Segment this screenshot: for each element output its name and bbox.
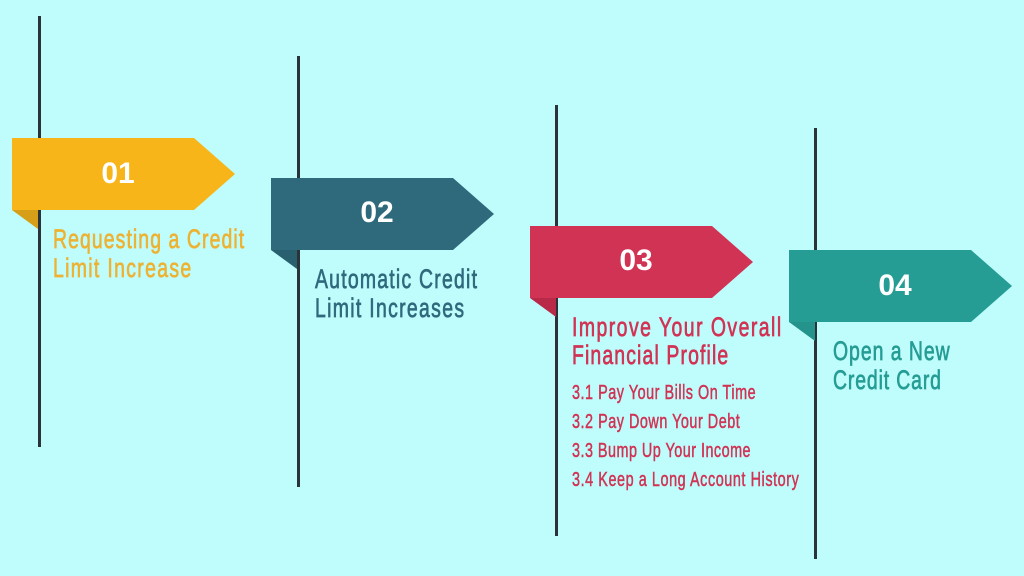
step 2 heading: Limit Increases	[315, 293, 464, 323]
step 3 ribbon fold	[530, 298, 556, 317]
step 3 sub-list	[572, 381, 799, 491]
step 1 pole	[38, 16, 41, 447]
step 2 heading: Automatic Credit	[315, 264, 477, 294]
step 4 number: 04	[878, 269, 912, 302]
step 1 arrow banner	[12, 138, 235, 210]
step 4 heading: Open a New	[833, 336, 950, 366]
step 3 sub-list: 3.2 Pay Down Your Debt	[572, 410, 740, 433]
step 3 number: 03	[619, 244, 653, 277]
step 3 heading: Improve Your Overall	[572, 312, 781, 342]
step 3 arrow banner	[530, 226, 753, 298]
step 1 heading: Limit Increase	[53, 253, 191, 283]
step 3 sub-list: 3.3 Bump Up Your Income	[572, 439, 751, 462]
step 3 heading	[572, 312, 781, 370]
step 3 sub-list: 3.4 Keep a Long Account History	[572, 468, 799, 491]
step 1 heading: Requesting a Credit	[53, 224, 245, 254]
step 1 ribbon fold	[12, 210, 38, 229]
step 4 heading: Credit Card	[833, 365, 941, 395]
step 3 heading: Financial Profile	[572, 340, 728, 370]
step 4 arrow banner	[789, 250, 1012, 322]
step 3 sub-list: 3.1 Pay Your Bills On Time	[572, 381, 756, 404]
step 2	[271, 56, 494, 487]
step 2 number: 02	[360, 196, 394, 229]
step 4	[789, 128, 1012, 559]
step 3 pole	[555, 105, 558, 536]
step 2 arrow banner	[271, 178, 494, 250]
step 1 number: 01	[101, 157, 135, 190]
step 1 heading	[53, 224, 245, 283]
step 2 ribbon fold	[271, 250, 297, 269]
step 4 ribbon fold	[789, 322, 815, 341]
step 3	[530, 105, 799, 536]
step 4 heading	[833, 336, 950, 395]
step 4 pole	[814, 128, 817, 559]
step 1	[12, 16, 245, 447]
step 2 heading	[315, 264, 477, 323]
step 2 pole	[297, 56, 300, 487]
